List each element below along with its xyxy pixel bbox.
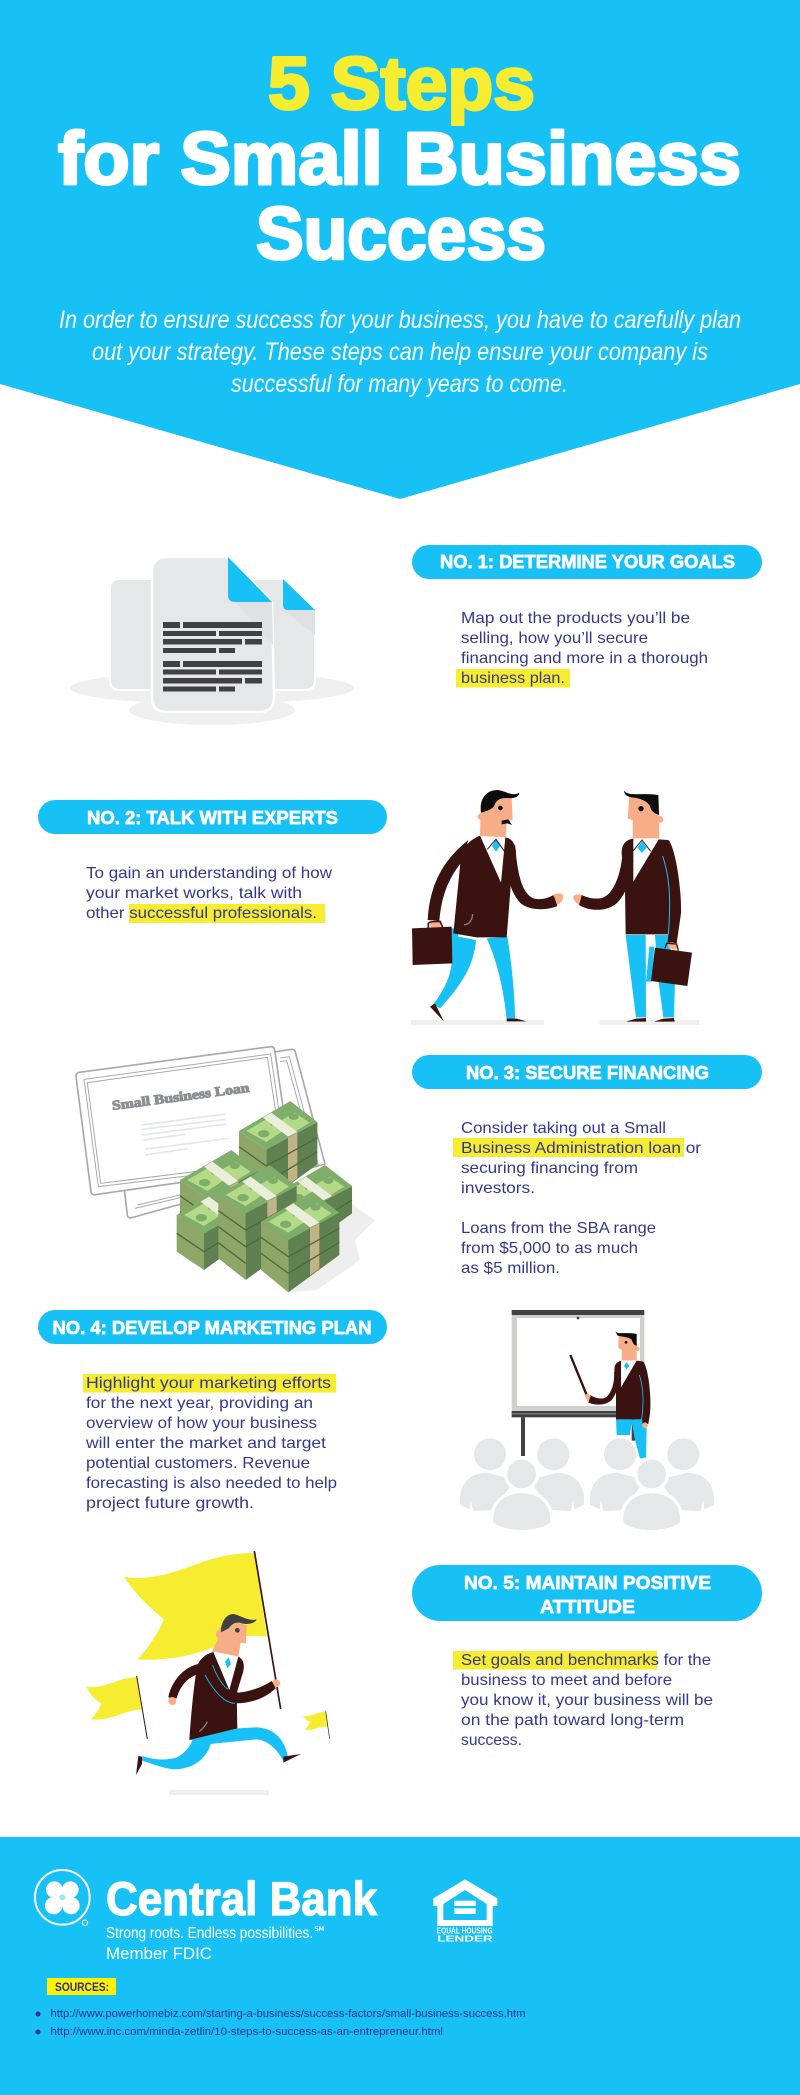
icon: documents xyxy=(70,557,354,725)
step 3 text xyxy=(453,1120,702,1277)
bank name: Central Bank xyxy=(106,1872,378,1925)
step 1 text: business plan. xyxy=(461,670,565,687)
runner xyxy=(136,1614,301,1775)
step 1 text: Map out the products you’ll be xyxy=(461,610,690,627)
step 4 text: project future growth. xyxy=(86,1495,254,1512)
equal housing lender logo xyxy=(433,1879,497,1944)
step 1 heading xyxy=(412,545,762,579)
illustration: two businessmen xyxy=(411,790,699,1025)
step 3 text: as $5 million. xyxy=(461,1260,560,1277)
step 3 text: Loans from the SBA range xyxy=(461,1220,656,1237)
step 4 text: overview of how your business xyxy=(86,1415,317,1432)
title: 5 Steps xyxy=(268,42,535,125)
illustration: loan certificate and money xyxy=(76,1047,375,1292)
step 4 heading: NO. 4: DEVELOP MARKETING PLAN xyxy=(52,1317,372,1338)
tagline: Strong roots. Endless possibilities.℠ xyxy=(106,1925,327,1942)
source links: http://www.powerhomebiz.com/starting-a-business/success-factors/small-business-success.htm xyxy=(50,2008,526,2020)
certificate: Small Business Loan xyxy=(111,1080,251,1113)
step 5 heading: ATTITUDE xyxy=(540,1596,635,1617)
step 5 text: on the path toward long-term xyxy=(461,1712,684,1729)
step 3 text: investors. xyxy=(461,1180,535,1197)
step 3 heading: NO. 3: SECURE FINANCING xyxy=(466,1062,709,1083)
step 3 heading xyxy=(412,1055,762,1089)
presenter xyxy=(570,1331,650,1458)
step 2 text xyxy=(86,865,332,923)
sources label: SOURCES: xyxy=(55,1980,109,1994)
left man xyxy=(412,790,563,1022)
step 4 heading xyxy=(38,1310,387,1344)
step 4 text: for the next year, providing an xyxy=(86,1395,313,1412)
title: Success xyxy=(256,192,546,275)
equal housing lender logo: LENDER xyxy=(437,1934,494,1944)
step 5 text: Set goals and benchmarks for the xyxy=(461,1652,711,1669)
step 4 text: potential customers. Revenue xyxy=(86,1455,310,1472)
money stacks xyxy=(177,1101,352,1292)
step 3 text: Business Administration loan or xyxy=(461,1140,702,1157)
step 3 text: from $5,000 to as much xyxy=(461,1240,638,1257)
step 1 text: selling, how you’ll secure xyxy=(461,630,648,647)
step 5 text: business to meet and before xyxy=(461,1672,672,1689)
title: for Small Business xyxy=(58,117,741,200)
illustration: man running with flag xyxy=(86,1551,330,1795)
source links xyxy=(36,2008,526,2038)
step 2 heading xyxy=(38,800,387,834)
step 3 text: securing financing from xyxy=(461,1160,638,1177)
member FDIC: Member FDIC xyxy=(106,1944,212,1963)
intro text: successful for many years to come. xyxy=(231,370,568,398)
step 5 text: success. xyxy=(461,1732,522,1749)
step 2 text: other successful professionals. xyxy=(86,905,317,922)
step 5 text xyxy=(453,1651,713,1749)
certificate xyxy=(76,1047,325,1218)
equal housing lender logo: EQUAL HOUSING xyxy=(437,1927,493,1936)
step 3 text: Consider taking out a Small xyxy=(461,1120,666,1137)
step 5 heading xyxy=(412,1565,762,1621)
flags xyxy=(86,1551,330,1739)
step 4 text: forecasting is also needed to help xyxy=(86,1475,337,1492)
step 2 text: your market works, talk with xyxy=(86,885,302,902)
step 4 text xyxy=(83,1374,337,1512)
step 4 text: will enter the market and target xyxy=(85,1435,327,1452)
step 5 heading: NO. 5: MAINTAIN POSITIVE xyxy=(464,1572,711,1593)
footer xyxy=(0,1837,800,2095)
right man xyxy=(573,791,692,1022)
step 4 text: Highlight your marketing efforts xyxy=(86,1375,331,1392)
title xyxy=(58,42,741,275)
intro text xyxy=(59,306,741,398)
whiteboard xyxy=(512,1310,644,1456)
illustration: presenter and audience xyxy=(460,1310,714,1532)
step 5 text: you know it, your business will be xyxy=(461,1692,713,1709)
step 2 heading: NO. 2: TALK WITH EXPERTS xyxy=(87,807,338,828)
step 2 text: To gain an understanding of how xyxy=(86,865,332,882)
step 1 text: financing and more in a thorough xyxy=(461,650,708,667)
logo mark: Central Bank flower xyxy=(35,1870,90,1925)
audience xyxy=(460,1437,714,1532)
intro text: out your strategy. These steps can help ensure your company is xyxy=(92,338,708,366)
source links: http://www.inc.com/minda-zetlin/10-steps-to-success-as-an-entrepreneur.html xyxy=(50,2026,443,2038)
header banner xyxy=(0,0,800,499)
step 1 text xyxy=(456,610,708,688)
step 1 heading: NO. 1: DETERMINE YOUR GOALS xyxy=(440,551,735,572)
